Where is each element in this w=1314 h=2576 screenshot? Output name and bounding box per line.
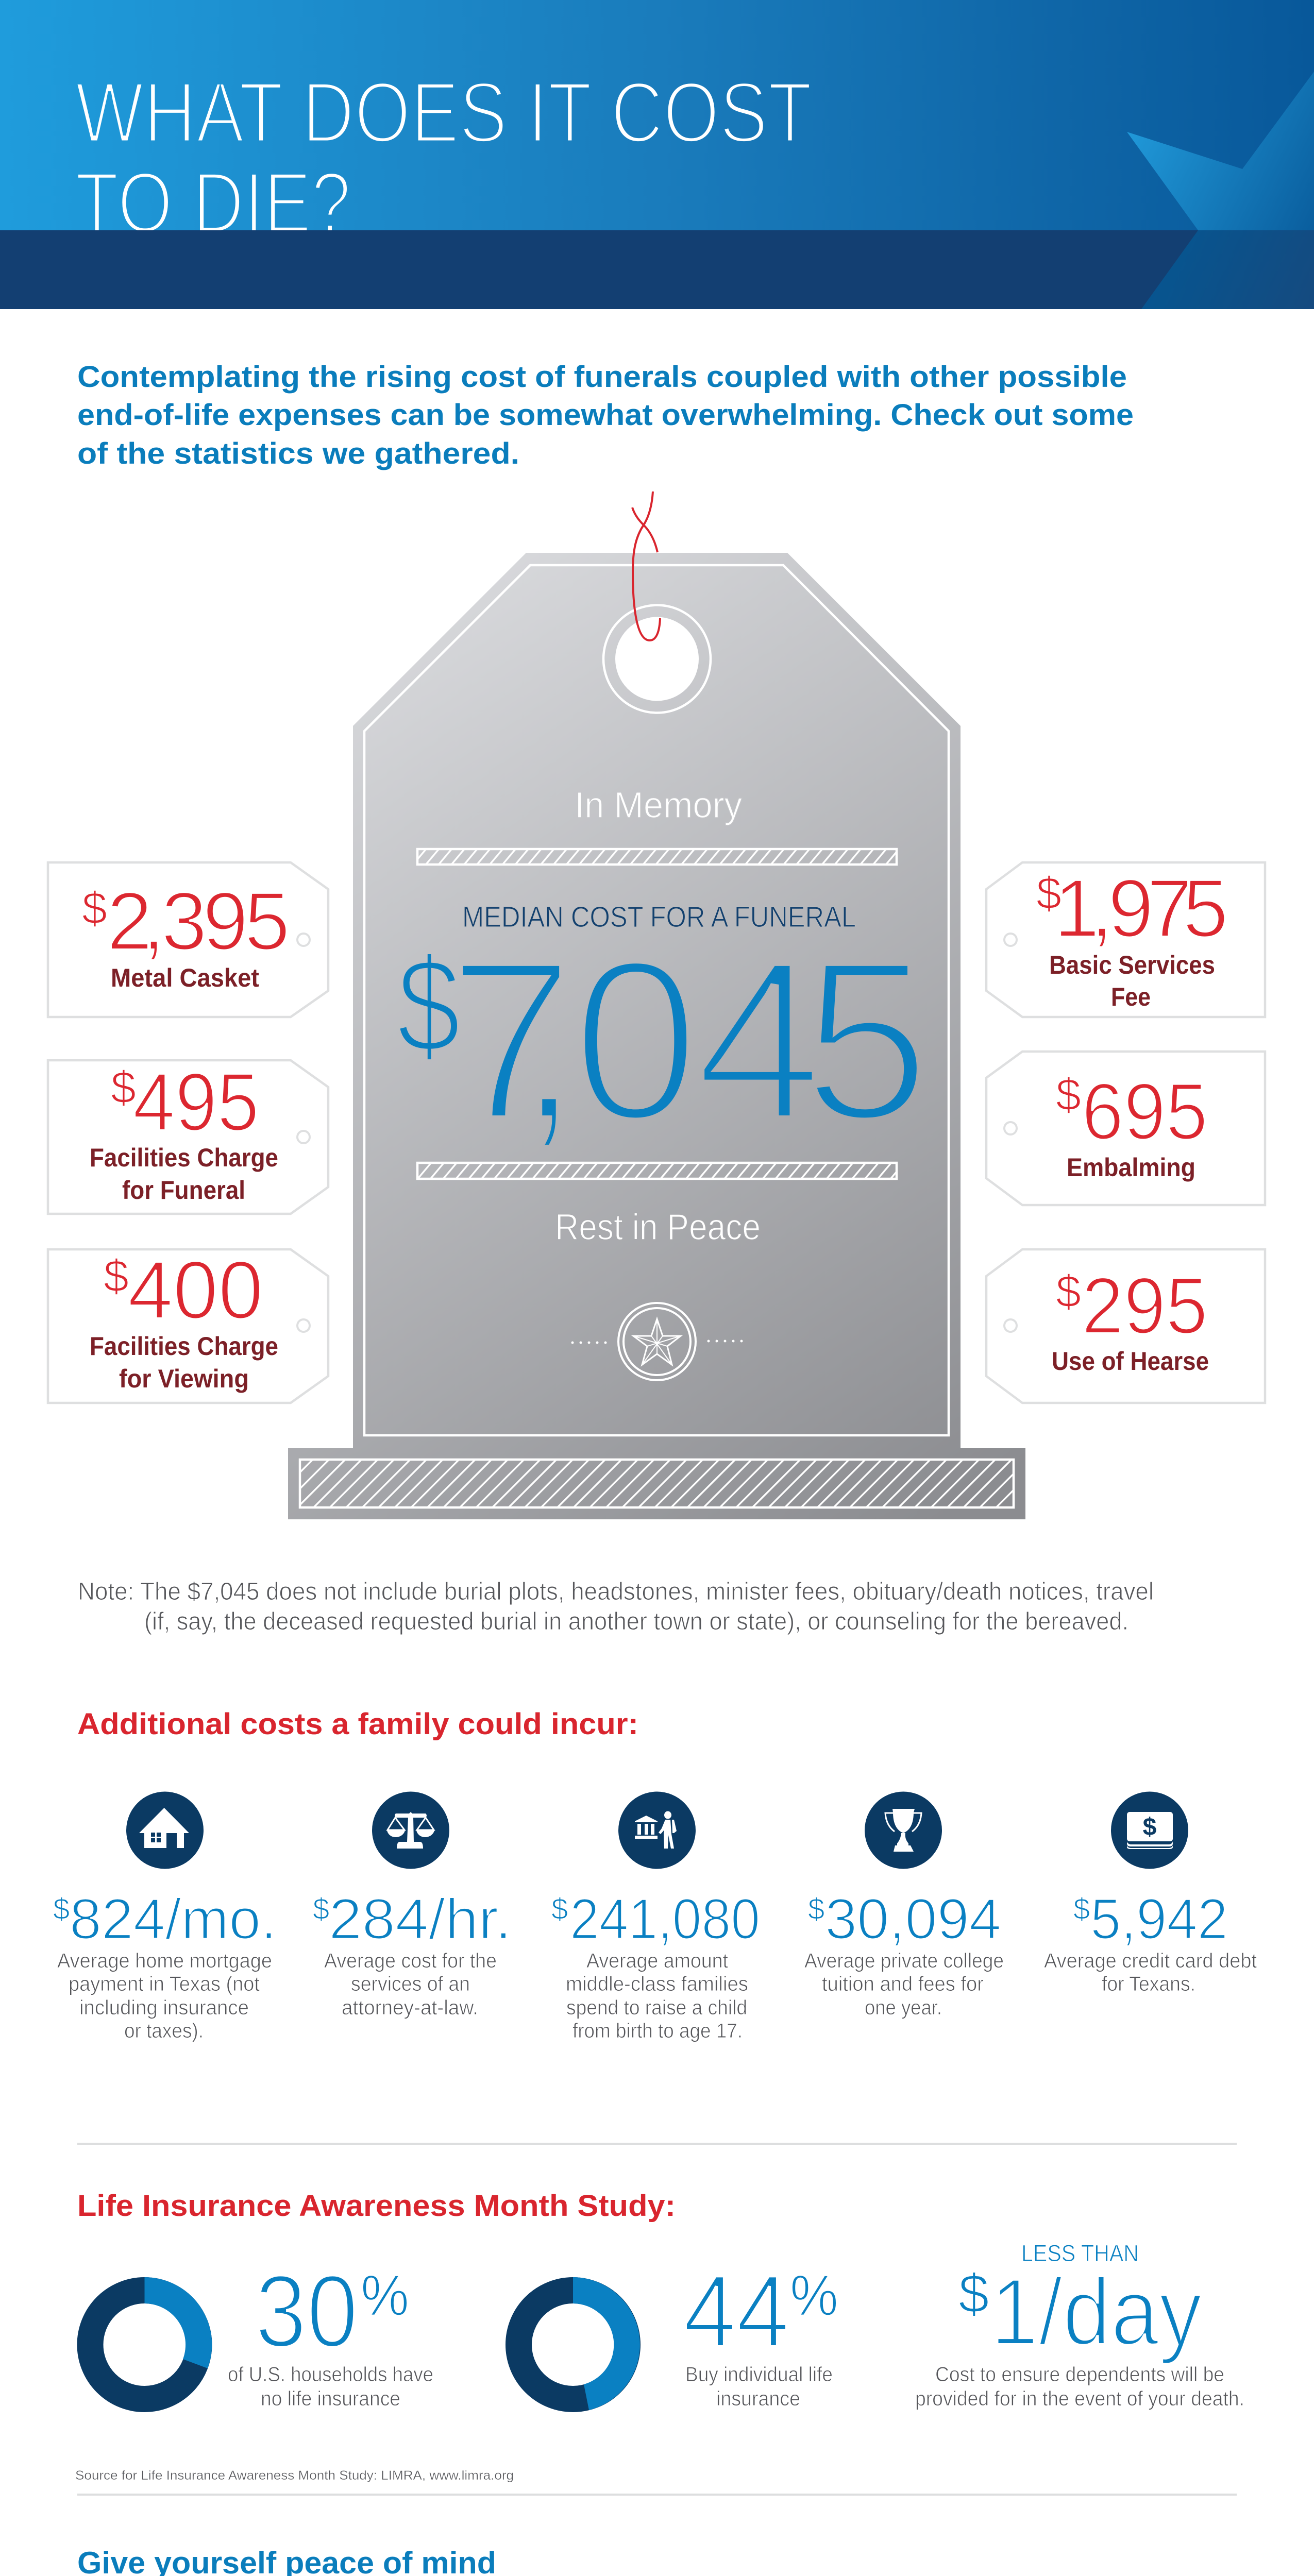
cost column: mortgage bbox=[53, 1792, 277, 2042]
icon: cash stack bbox=[1111, 1792, 1188, 1869]
title: TO DIE? bbox=[75, 154, 351, 251]
description: provided for in the event of your death. bbox=[915, 2387, 1244, 2410]
figure: 284/hr. bbox=[329, 1887, 512, 1951]
tag: embalming: $ bbox=[1056, 1069, 1081, 1120]
tag: metal casket: Metal Casket bbox=[111, 963, 259, 992]
description bbox=[566, 1950, 748, 2042]
tag: embalming bbox=[986, 1052, 1265, 1205]
median cost figure: 7,045 bbox=[447, 912, 931, 1168]
description: Average home mortgage bbox=[57, 1950, 272, 1972]
note text bbox=[78, 1578, 1154, 1635]
median cost label: MEDIAN COST FOR A FUNERAL bbox=[462, 901, 856, 934]
tag: use of hearse: Use of Hearse bbox=[1052, 1347, 1209, 1376]
intro text: of the statistics we gathered. bbox=[77, 437, 519, 470]
header banner bbox=[0, 0, 1314, 309]
description: middle-class families bbox=[566, 1973, 748, 1995]
tag: facilities charge for viewing: 400 bbox=[128, 1244, 263, 1336]
description: insurance bbox=[716, 2387, 800, 2410]
title bbox=[75, 64, 812, 251]
tag: facilities charge for viewing: $ bbox=[104, 1250, 129, 1301]
intro text: Contemplating the rising cost of funerals coupled with other possible bbox=[77, 360, 1127, 394]
description: spend to raise a child bbox=[566, 1996, 747, 2019]
description: no life insurance bbox=[261, 2387, 400, 2410]
tag hole bbox=[603, 605, 711, 713]
tag: metal casket: 2,395 bbox=[107, 875, 290, 967]
figure: $ bbox=[808, 1892, 824, 1926]
cost column: raising a child bbox=[551, 1792, 760, 2042]
tag: facilities charge for funeral: Facilities Charge bbox=[90, 1143, 278, 1172]
figure: % bbox=[790, 2263, 838, 2328]
description bbox=[228, 2363, 433, 2410]
description: tuition and fees for bbox=[822, 1973, 984, 1995]
tag: facilities charge for funeral: $ bbox=[111, 1062, 136, 1113]
tag: basic services fee: Basic Services bbox=[1049, 951, 1215, 979]
donut chart 30 percent bbox=[90, 2277, 212, 2399]
description bbox=[685, 2363, 833, 2410]
description: for Texans. bbox=[1102, 1973, 1195, 1995]
tag: embalming: Embalming bbox=[1067, 1153, 1195, 1182]
title: WHAT DOES IT COST bbox=[75, 64, 812, 161]
description: from birth to age 17. bbox=[572, 2020, 743, 2042]
tag: facilities charge for viewing: Facilities Charge bbox=[90, 1332, 278, 1361]
figure: % bbox=[361, 2263, 409, 2328]
tag: basic services fee bbox=[986, 862, 1265, 1017]
tag: facilities charge for funeral bbox=[48, 1056, 328, 1214]
hatched bar bottom bbox=[417, 1163, 897, 1179]
description: Average amount bbox=[586, 1950, 728, 1972]
tag: basic services fee: Fee bbox=[1111, 982, 1151, 1011]
tag: facilities charge for funeral: 495 bbox=[133, 1056, 259, 1148]
icon: cash stack: $ bbox=[1143, 1814, 1157, 1841]
intro text bbox=[77, 360, 1134, 470]
tag: facilities charge for viewing bbox=[48, 1244, 328, 1403]
figure: 5,942 bbox=[1090, 1887, 1228, 1951]
tag: use of hearse: 295 bbox=[1082, 1261, 1208, 1351]
tag: use of hearse bbox=[986, 1249, 1265, 1403]
source line: Source for Life Insurance Awareness Month Study: LIMRA, www.limra.org bbox=[75, 2468, 514, 2483]
main price tag headstone bbox=[288, 492, 1025, 1519]
tag: metal casket bbox=[48, 862, 328, 1017]
stat: 44 percent bbox=[518, 2254, 838, 2410]
hatched base bbox=[300, 1460, 1014, 1507]
description: one year. bbox=[865, 1996, 942, 2019]
star seal bbox=[571, 1303, 743, 1380]
note text: Note: The $7,045 does not include burial plots, headstones, minister fees, obituary/death notices, travel bbox=[78, 1578, 1154, 1605]
icon: house bbox=[126, 1792, 204, 1869]
description: payment in Texas (not bbox=[69, 1973, 260, 1995]
intro text: end-of-life expenses can be somewhat overwhelming. Check out some bbox=[77, 398, 1134, 432]
heading: additional costs: Additional costs a family could incur: bbox=[77, 1707, 638, 1741]
header star bbox=[1127, 72, 1314, 309]
description: or taxes). bbox=[124, 2020, 204, 2042]
description bbox=[804, 1950, 1004, 2019]
figure: 44 bbox=[683, 2254, 789, 2369]
hatched bar top bbox=[417, 849, 897, 865]
description bbox=[915, 2363, 1244, 2410]
figure: $ bbox=[551, 1892, 568, 1926]
figure: $ bbox=[53, 1892, 70, 1926]
description: Buy individual life bbox=[685, 2363, 833, 2386]
description bbox=[324, 1950, 497, 2019]
figure: 241,080 bbox=[570, 1887, 760, 1951]
tag: use of hearse: $ bbox=[1056, 1266, 1081, 1317]
dark band bbox=[0, 230, 1314, 309]
stat: 30 percent bbox=[90, 2254, 433, 2410]
stat: less than one dollar a day bbox=[915, 2240, 1244, 2410]
tag body bbox=[288, 553, 1025, 1519]
heading: life insurance study: Life Insurance Awareness Month Study: bbox=[77, 2189, 676, 2223]
less than label: LESS THAN bbox=[1021, 2240, 1139, 2266]
tag inner border bbox=[364, 565, 949, 1435]
median cost figure: $ bbox=[397, 930, 461, 1081]
icon: school and student bbox=[618, 1792, 696, 1869]
description: services of an bbox=[351, 1973, 470, 1995]
note text: (if, say, the deceased requested burial in another town or state), or counseling for the bereaved. bbox=[144, 1608, 1128, 1635]
red string bbox=[632, 492, 660, 640]
description bbox=[1044, 1950, 1257, 1995]
description: of U.S. households have bbox=[228, 2363, 433, 2386]
tag: metal casket: $ bbox=[82, 883, 107, 934]
icon: scales bbox=[372, 1792, 449, 1869]
figure: 30 bbox=[255, 2254, 358, 2369]
in memory text: In Memory bbox=[575, 785, 742, 826]
description: attorney-at-law. bbox=[342, 1996, 478, 2019]
tag: facilities charge for funeral: for Funeral bbox=[122, 1176, 245, 1205]
description: Average cost for the bbox=[324, 1950, 497, 1972]
tag: basic services fee: $ bbox=[1036, 868, 1062, 919]
description: Cost to ensure dependents will be bbox=[935, 2363, 1224, 2386]
description bbox=[57, 1950, 272, 2042]
icon: trophy bbox=[865, 1792, 942, 1869]
figure: 824/mo. bbox=[70, 1887, 277, 1951]
donut chart 44 percent bbox=[518, 2277, 640, 2410]
figure: $ bbox=[958, 2263, 989, 2325]
cost column: credit card bbox=[1044, 1792, 1257, 1995]
figure: $ bbox=[313, 1892, 329, 1926]
cost column: attorney bbox=[313, 1792, 512, 2019]
cost column: college bbox=[804, 1792, 1004, 2019]
description: including insurance bbox=[79, 1996, 249, 2019]
figure: 1/day bbox=[990, 2259, 1202, 2365]
tag: basic services fee: 1,975 bbox=[1054, 862, 1228, 954]
description: Average credit card debt bbox=[1044, 1950, 1257, 1972]
tag: facilities charge for viewing: for Viewing bbox=[119, 1364, 249, 1393]
tag: embalming: 695 bbox=[1082, 1067, 1208, 1157]
rest in peace text: Rest in Peace bbox=[555, 1207, 761, 1248]
figure: 30,094 bbox=[825, 1887, 1001, 1951]
description: Average private college bbox=[804, 1950, 1004, 1972]
figure: $ bbox=[1073, 1892, 1090, 1926]
